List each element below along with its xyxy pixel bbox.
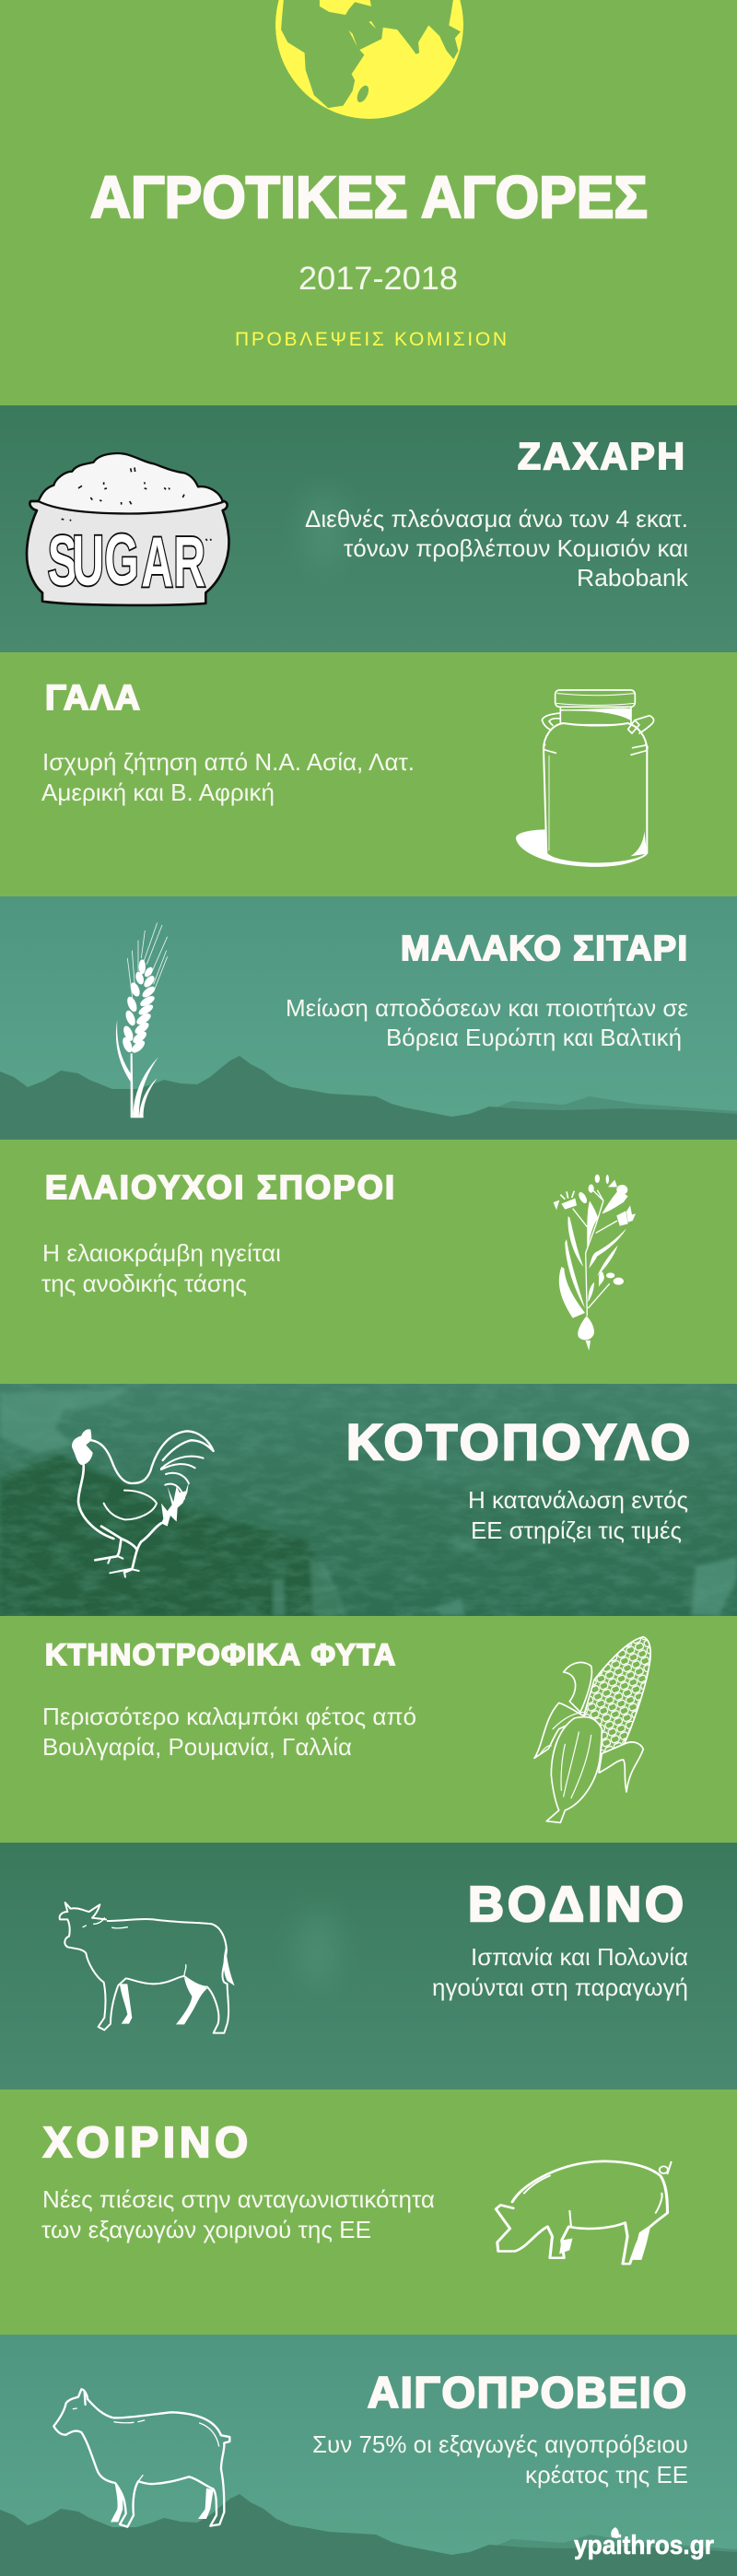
pork text block: των εξαγωγών χοιρινού της ΕΕ [41,2216,371,2243]
beef background [0,1843,737,2090]
panel: header [90,0,648,350]
tagline: ΠΡΟΒΛΕΨΕΙΣ ΚΟΜΙΣΙΟΝ [235,329,507,350]
icon: corn [534,1637,650,1822]
feed crops text block: Περισσότερο καλαμπόκι φέτος από [42,1703,416,1730]
beef text block [432,1943,688,2001]
beef text block: Ισπανία και Πολωνία [471,1943,688,1971]
distant mountains [470,2535,737,2576]
milk text block: Αμερική και Β. Αφρική [41,779,275,806]
icon: sheep [53,2389,229,2527]
feed crops text block: Βουλγαρία, Ρουμανία, Γαλλία [42,1733,352,1761]
chicken text block [468,1486,688,1544]
panel: pork [41,2118,672,2264]
icon: pig [496,2161,672,2264]
wheat text block [286,994,688,1051]
icon: rooster [72,1429,214,1577]
milk text block: Ισχυρή ζήτηση από Ν.Α. Ασία, Λατ. [42,748,415,776]
wheat text block: Βόρεια Ευρώπη και Βαλτική [386,1024,682,1051]
icon: wheat [116,923,168,1118]
sugar background glow [304,491,345,568]
oilseeds text block [41,1239,281,1297]
beef background glow [298,1910,338,1987]
panel: milk [41,679,654,867]
wheat text block: Μείωση αποδόσεων και ποιοτήτων σε [286,994,688,1022]
sheep text block: Συν 75% οι εξαγωγές αιγοπρόβειου [312,2430,688,2458]
mountains [0,2494,737,2576]
panel: soft wheat [0,896,737,1140]
milk text block [41,748,415,806]
panel: feed crops [42,1637,650,1822]
chicken text block: Η κατανάλωση εντός [468,1486,688,1514]
sheep heading: ΑΙΓΟΠΡΟΒΕΙΟ [368,2368,686,2417]
sugar text block: Διεθνές πλεόνασμα άνω των 4 εκατ. [305,505,688,533]
sugar text block: τόνων προβλέπουν Κομισιόν και [344,534,688,562]
oilseeds text block: Η ελαιοκράμβη ηγείται [42,1239,281,1267]
pork heading: ΧΟΙΡΙΝΟ [43,2118,248,2166]
feed crops text block [42,1703,416,1761]
sheep background [0,2335,737,2576]
sheep text block: κρέατος της ΕΕ [525,2461,688,2488]
icon: sugar bowl [27,453,228,605]
mountains [0,1056,737,1140]
panel: chicken [0,1384,737,1616]
icon: cow [60,1903,235,2033]
sheep text block [312,2430,688,2488]
oilseeds heading: ΕΛΑΙΟΥΧΟΙ ΣΠΟΡΟΙ [45,1168,394,1206]
icon: globe [275,0,463,119]
chicken text block: ΕΕ στηρίζει τις τιμές [471,1516,682,1544]
distant mountains [470,1096,737,1140]
panel: beef [0,1843,737,2090]
logo: ypaithros.gr: ypaithros.gr [574,2531,714,2560]
chicken heading: ΚΟΤΟΠΟΥΛΟ [346,1413,690,1470]
wheat heading: ΜΑΛΑΚΟ ΣΙΤΑΡΙ [401,930,687,968]
pork text block: Νέες πιέσεις στην ανταγωνιστικότητα [42,2185,435,2213]
sugar text block: Rabobank [577,564,689,591]
beef text block: ηγούνται στη παραγωγή [432,1973,688,2001]
sugar text block [305,505,689,591]
panel: sugar [0,405,737,652]
subtitle: years: 2017-2018 [298,261,458,297]
sugar heading: ΖΑΧΑΡΗ [518,435,684,477]
icon: milk can [516,690,654,867]
pork text block [41,2185,435,2243]
beef heading: ΒΟΔΙΝΟ [468,1877,684,1932]
milk heading: ΓΑΛΑ [45,679,140,718]
icon: sugar bowl: SUGAR [48,520,205,602]
sugar background [0,405,737,652]
chicken photo background [0,1384,737,1616]
title: ΑΓΡΟΤΙΚΕΣ ΑΓΟΡΕΣ [90,164,648,230]
panel: oilseeds [41,1168,636,1351]
icon: rapeseed plant [554,1175,636,1351]
oilseeds text block: της ανοδικής τάσης [41,1270,247,1297]
feed crops heading: ΚΤΗΝΟΤΡΟΦΙΚΑ ΦΥΤΑ [45,1638,395,1671]
wheat background [0,896,737,1140]
panel: sheep and goat [0,2335,737,2576]
